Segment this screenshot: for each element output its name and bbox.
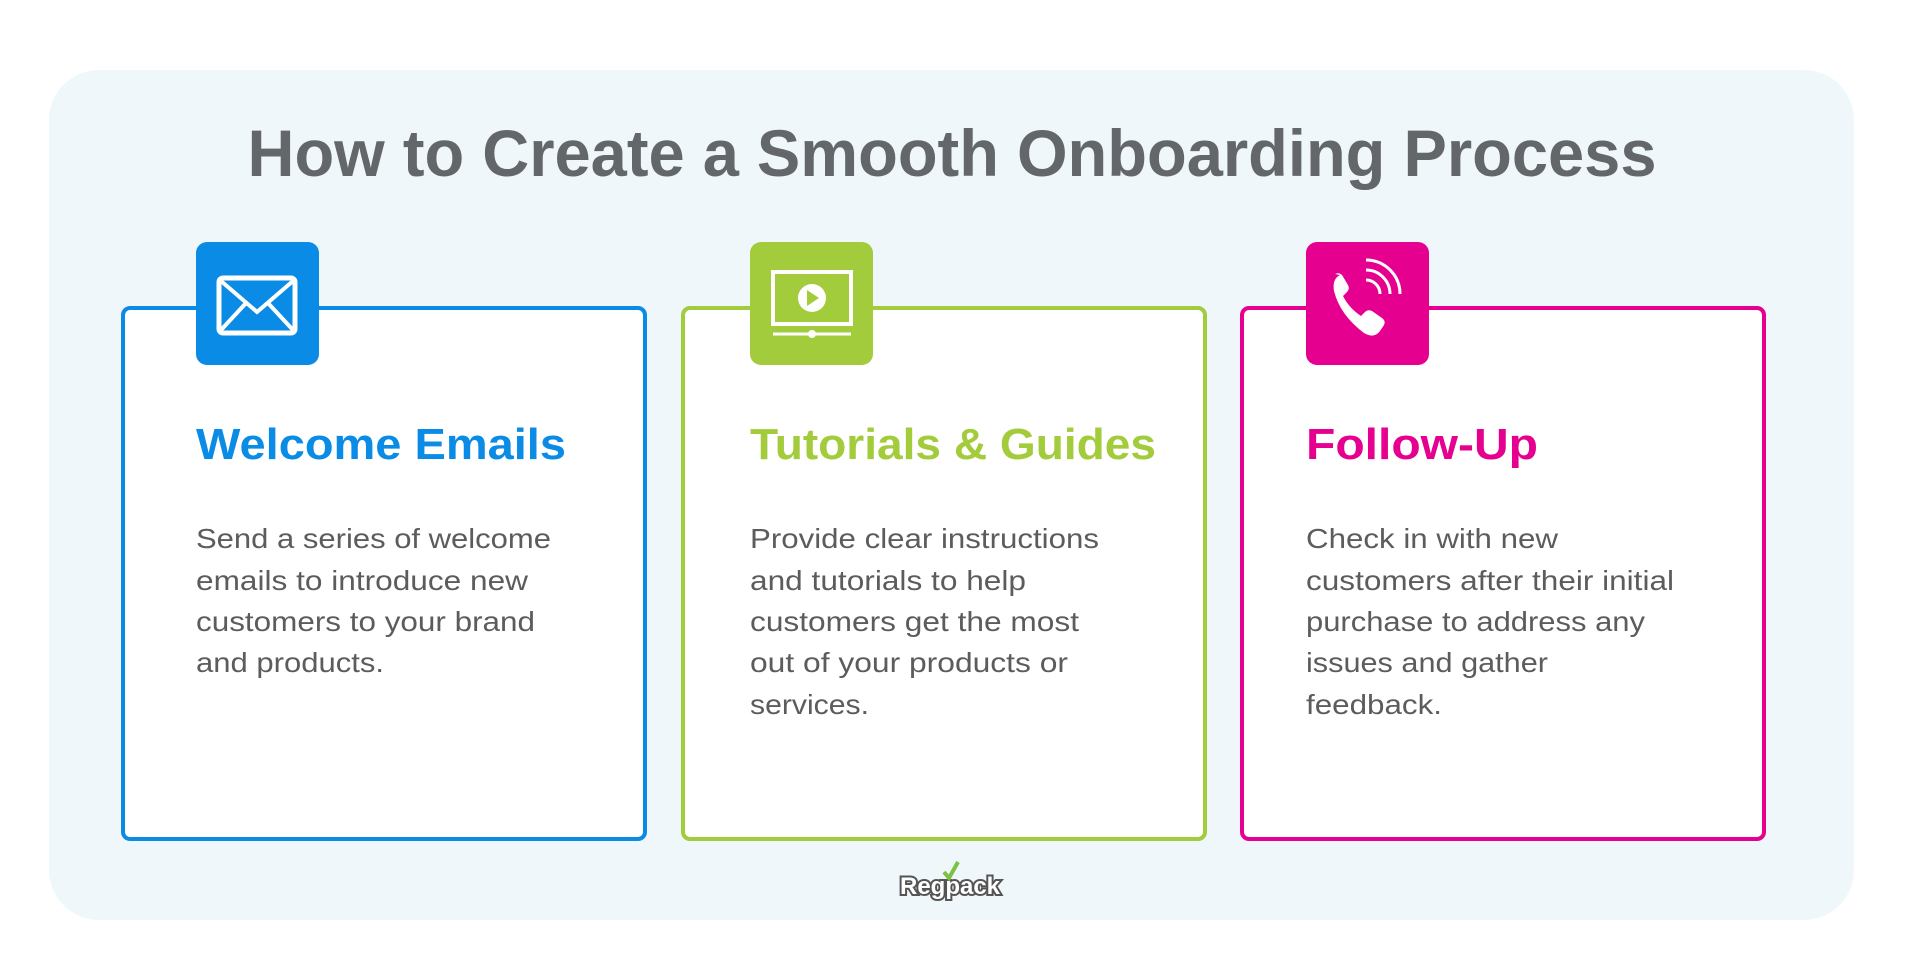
text block: Send a series of welcome (196, 523, 551, 554)
text block: Check in with new (1306, 523, 1559, 554)
text block: customers after their initial (1306, 565, 1674, 596)
text block: customers to your brand (196, 606, 535, 637)
text block: feedback. (1306, 689, 1442, 720)
text block: services. (750, 689, 869, 720)
heading: Welcome Emails (196, 420, 566, 469)
text block: purchase to address any (1306, 606, 1645, 637)
text block: issues and gather (1306, 647, 1548, 678)
icon: envelope (196, 242, 319, 365)
text block (1306, 523, 1674, 720)
logo: Regpack: Regpack (900, 873, 1001, 900)
text block: emails to introduce new (196, 565, 529, 596)
text block (196, 523, 551, 678)
icon: video monitor (750, 242, 873, 365)
text block: Provide clear instructions (750, 523, 1099, 554)
text block: customers get the most (750, 606, 1079, 637)
icon: phone (1306, 242, 1429, 365)
text block: and products. (196, 647, 384, 678)
heading: Tutorials & Guides (750, 420, 1156, 469)
heading: Follow-Up (1306, 420, 1538, 469)
text block: out of your products or (750, 647, 1068, 678)
text block: and tutorials to help (750, 565, 1026, 596)
panel: tutorials (683, 242, 1205, 839)
title: How to Create a Smooth Onboarding Process (248, 116, 1656, 190)
text block (750, 523, 1099, 720)
panel: welcome emails (123, 242, 645, 839)
panel: follow-up (1242, 242, 1764, 839)
